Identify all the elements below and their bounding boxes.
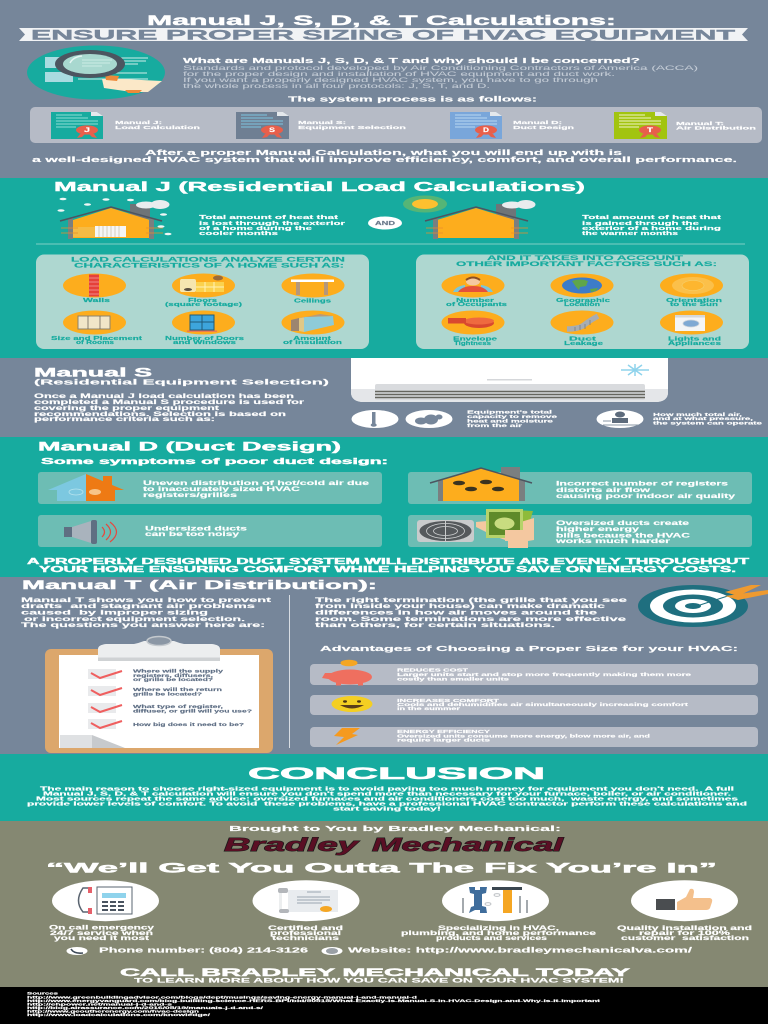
text block: total capacity: from the air [467,423,522,429]
icon: lightning bolt [334,728,360,745]
check items [88,669,122,729]
label: envelope tightness: Tightness [454,341,491,347]
text: uneven distribution: Uneven distribution of hot/cold air due [143,481,370,487]
text block: heat lost: Total amount of heat that [199,215,338,221]
icon: tools [442,880,549,921]
ribbon subtitle: ENSURE PROPER SIZING OF HVAC EQUIPMENT [31,26,736,42]
text block: conclusion [27,786,747,812]
text block: right termination: differences in how air moves around the [315,610,598,616]
heading: conclusion: CONCLUSION [248,765,545,783]
heading: Manual J: Manual J (Residential Load Calculations) [54,179,585,194]
label: floors: (square footage) [165,302,243,308]
label: specializing: plumbing, and home performance [401,931,597,937]
label: size and placement: Size and Placement [51,336,143,342]
text: phone number: Phone number: (804) 214-3126 [99,946,308,955]
text block: Manual S: completed a Manual S procedure is used for [34,400,305,406]
icon: globe [550,274,614,298]
text: brought to you by: Brought to You by Bradley Mechanical: [229,826,561,833]
checklist questions: diffuser, or grill will you use? [133,708,252,714]
label: certified: professional [270,931,342,937]
text block: conclusion: start saving today! [333,806,442,812]
panel: sources [0,987,768,1024]
panel: Manual T [0,577,768,754]
text: uneven distribution: to inaccurately sized HVAC [143,487,301,493]
logo: Bradley Mechanical: Mechanical [372,835,565,855]
label: on call: you need it most [54,936,149,942]
panel: process steps [30,107,762,143]
subheading: equipment selection: (Residential Equipment Selection) [34,378,330,387]
label: walls: Walls [83,298,110,304]
panel: load calculation characteristics [36,254,369,349]
logo: Bradley Mechanical: Bradley [224,835,360,855]
icon: thumbs up [631,880,738,921]
text block: heat gained: Total amount of heat that [582,215,721,221]
label: doors and windows: Number of Doors [165,336,244,342]
icon: grille and money [417,509,534,548]
label: geographic location: Location [564,302,600,308]
icon: document T: T [647,128,654,134]
icon: thermometer [352,410,398,428]
text block: after calculation: a well-designed HVAC system that will improve efficiency, comfort, and overall performance. [32,157,737,164]
label: Manual S [298,120,406,131]
text: energy efficiency: Oversized units consume more energy, blow more air, and [397,734,650,738]
icon: occupants [442,274,504,298]
card: reduces cost [310,660,758,686]
text: oversized ducts: bills because the HVAC [556,534,691,540]
card: incorrect registers [408,467,752,504]
panel: sources: Sources [27,992,58,996]
icon: window [172,310,235,334]
icon: 24h phone [52,880,159,921]
text block: conclusion: Most sources repeat the same advice: oversized furnaces and air conditioners cost too much, waste energy, and sometimes [36,796,738,802]
label: Manual T: Air Distribution [676,126,756,132]
heading: advantages: Advantages of Choosing a Proper Size for your HVAC: [320,646,738,653]
text block: Manual T intro: The questions you answer here are: [21,622,265,629]
label: orientation [666,298,722,308]
text block: total air: How much total air, [653,412,743,418]
text block: intro: What are Manuals J, S, D, & T and why should I be concerned? [183,58,640,65]
text block: intro [183,58,698,90]
icon: document D [450,112,502,139]
callout: properly designed duct system: A PROPERLY DESIGNED DUCT SYSTEM WILL DISTRIBUTE AIR EVENLY THROUGHOUT [27,557,749,566]
icon: floor plan [63,310,126,334]
text block: conclusion: provide lower levels of comfort. To avoid these problems, have a professional HVAC contractor perform these calculations and [27,802,747,808]
text block: heat gained: exterior of a home during [582,226,721,232]
card: undersized ducts [38,515,382,547]
checklist questions: Where will the return [133,687,222,693]
text: incorrect registers: distorts air flow [556,488,651,494]
panel: conclusion [0,754,768,821]
heading: system process: The system process is as follows: [288,96,537,104]
label: quality [617,926,753,942]
heading: other factors: OTHER IMPORTANT FACTORS SUCH AS: [456,262,717,268]
text: uneven distribution [143,481,370,499]
text: increases comfort: in the summer [397,706,460,711]
text block: heat lost [199,215,347,237]
text block: Manual S: recommendations. Selection is based on [34,412,287,418]
text: energy efficiency [397,729,650,742]
icon: document T [614,112,667,139]
label: Manual S: Equipment Selection [298,125,406,131]
text: reduces cost [397,668,692,682]
icon: walls [63,274,126,298]
label: on call: On call emergency [49,926,155,932]
panel: sources: http://www.loadcalculations.com/knowledge/ [27,1013,210,1017]
text block: Manual T intro: drafts and stagnant air problems [21,603,256,610]
heading: Manual S: Manual S [34,368,153,380]
text: increases comfort [397,698,689,711]
label: duct leakage: Duct [569,336,597,342]
text block: Manual S: Once a Manual J load calculation has been [34,394,295,400]
label: on call [49,926,155,942]
label: doors and windows [165,336,244,346]
label: insulation: Amount [293,336,332,342]
call to action: TO LEARN MORE ABOUT HOW YOU CAN SAVE ON YOUR HVAC SYSTEM! [134,979,624,985]
label: ceilings: Ceilings [294,298,331,304]
panel: Manual J [0,178,768,358]
text block: Manual T intro: caused by improper sizing [21,610,208,616]
label: certified: technicians [272,936,340,942]
icon: insulation [282,310,344,334]
panel: other factors [416,254,749,349]
text block: after calculation [32,150,737,164]
icon: phone [66,947,88,955]
icon: document D: D [483,128,490,134]
icon: magnifying glass over document [27,46,165,100]
icon: piggy bank [322,660,372,686]
label: doors and windows: and Windows [173,340,236,346]
callout: properly designed duct system: YOUR HOME ENSURING COMFORT WHILE HELPING YOU SAVE ON ENERGY COSTS. [39,565,736,574]
callout: properly designed duct system [27,557,749,574]
text block: right termination: The right termination (the grille that you see [315,597,628,604]
heading: other factors: AND IT TAKES INTO ACCOUNT [487,256,684,262]
checklist questions: or grills be located? [133,677,213,683]
label: quality: customer satisfaction [621,936,750,942]
heading: other factors [456,256,717,268]
text block: right termination: than others, for certain situations. [315,622,556,629]
panel: header [0,0,768,178]
text: oversized ducts: higher energy [556,527,640,533]
icon: washing machine [660,310,723,334]
label: duct leakage: Leakage [564,341,603,347]
label: orientation: Orientation [666,298,722,304]
label: floors: Floors [188,298,217,304]
text block: right termination: room. Some terminations are more effective [315,616,627,623]
heading: Manual T: Manual T (Air Distribution): [22,580,377,592]
icon: certificate [252,880,360,921]
icon: document S: S [269,128,275,134]
badge: AND: AND [375,221,396,227]
text: energy efficiency: ENERGY EFFICIENCY [397,729,490,734]
icon: ceilings [282,274,344,298]
call to action [120,967,632,985]
label: Manual T: Manual T: [676,121,725,127]
card: oversized ducts [408,509,752,548]
heading: Manual D: Manual D (Duct Design) [38,442,341,454]
label: Manual J: Manual J: [115,120,163,126]
text block: total capacity: capacity to remove [467,414,558,420]
clipboard checklist [45,636,273,753]
label: size and placement [51,336,143,346]
icon: smiley [332,696,372,712]
label: lights and appliances [668,336,721,347]
label: lights and appliances: Lights and [668,336,721,342]
label: Manual S: Manual S: [298,120,347,126]
text block: Manual T intro [21,597,273,629]
text block: total capacity [467,410,558,429]
text: oversized ducts: Oversized ducts create [556,521,690,527]
text: oversized ducts [554,521,691,545]
label: Manual T [676,121,756,132]
icon: sun orientation [660,274,723,298]
ribbon subtitle [19,26,748,42]
checklist questions: registers, diffusers, [133,673,214,679]
text block: total air: and at what pressure, [653,416,754,422]
call to action: CALL BRADLEY MECHANICAL TODAY [120,967,632,979]
label: insulation [283,336,342,346]
label: occupants: of Occupants [446,302,507,308]
subheading: symptoms: Some symptoms of poor duct design: [41,457,388,466]
text block: intro: the whole process in all four protocols: J, S, T, and D. [183,84,491,90]
panel: sources: http://ehpower.net/manual-j-d-and-s [27,1002,172,1006]
label: quality: repair for 100% [639,931,731,937]
label: geographic location: Geographic [556,298,610,304]
panel: sources: http://blog.airassurance.com/2016/05/19/manuals-j-d-and-s/ [27,1006,263,1010]
icon: pressure gauge [596,410,644,428]
label: Manual D: Manual D: [513,120,563,126]
text block: Manual S: performance criteria such as: [34,417,215,423]
label: specializing: Specializing in HVAC, [438,926,560,932]
text: website: Website: http://www.bradleymechanicalva.com/ [348,946,694,955]
text: undersized ducts: Undersized ducts [145,526,248,532]
label: quality: Quality installation and [617,926,753,932]
text block: Manual S [34,394,305,423]
text: incorrect registers: causing poor indoor air quality [556,494,736,500]
label: certified [268,926,344,942]
label: envelope tightness: Envelope [453,336,497,342]
label: floors [165,298,243,308]
checklist questions: Where will the supply [133,669,224,675]
label: duct leakage [564,336,603,347]
icon: sun [403,196,447,212]
icon: target with arrow [638,585,768,627]
text block: heat gained [582,215,721,237]
text: uneven distribution: registers/grilles [143,493,238,499]
checklist questions: What type of register, [133,704,224,710]
text block: intro: for the proper design and installation of HVAC equipment and duct work. [183,72,616,78]
label: Manual D [513,120,574,131]
label: envelope tightness [453,336,497,347]
text: reduces cost: Larger units start and stop more frequently making them more [397,672,692,677]
text block: heat lost: is lost through the exterior [199,221,347,227]
text block: heat lost: cooler months [199,231,278,237]
card: increases comfort [310,695,758,715]
text block: conclusion: Manual J, S, D, & T calculation will ensure you don't spend more than necessary for your furnace, boiler, or air conditioner. [43,792,732,798]
panel: Manual S [0,358,768,437]
badge: AND [368,216,402,230]
card: uneven distribution [38,472,382,504]
text: incorrect registers [556,482,736,500]
text: oversized ducts: works much harder [554,539,671,545]
text block: after calculation: After a proper Manual Calculation, what you will end up with is [145,150,622,157]
text: undersized ducts [145,526,248,538]
text block: intro: Standards and protocol developed by Air Conditioning Contractors of America (ACCA) [183,66,698,72]
text block: Manual S: covering the proper equipment [34,406,219,412]
text: undersized ducts: can be too noisy [145,532,240,538]
heading: load calculations: LOAD CALCULATIONS ANALYZE CERTAIN [71,258,345,264]
text block: heat lost: of a home during the [199,226,312,232]
text block: heat gained: the warmer months [582,231,678,237]
label: Manual D: Duct Design [513,125,574,131]
icon: house with registers [430,467,532,501]
icon: duct [550,310,614,334]
label: geographic location [556,298,610,308]
icon: document J [51,112,103,139]
icon: hot and cold house [48,474,124,501]
label: lights and appliances: Appliances [668,341,721,347]
panel: sources: http://www.energyvanguard.com/blog-building-science-HERS-BPI/bid/50515/What-Exactly-Is-Manual-S-in-HVAC-Design-and-Why-Is-It-Important [27,999,602,1003]
text block: total air: the system can operate [653,420,763,426]
text: increases comfort: Cools and dehumidifies air simultaneously increasing comfort [397,702,689,707]
label: insulation: of insulation [283,340,342,346]
label: specializing [401,926,597,942]
text: reduces cost: costly than smaller units [397,676,510,682]
text block: right termination [315,597,628,629]
checklist questions: How big does it need to be? [133,722,244,728]
text block: conclusion: The main reason to choose right-sized equipment is to avoid paying too much money for equipment you don't need. A full [40,786,735,792]
icon: speaker [64,520,116,544]
text block: Manual T intro: or incorrect equipment selection. [24,616,246,623]
icon: document J: J [84,128,90,134]
card: energy efficiency [310,727,758,747]
heading: load calculations: CHARACTERISTICS OF A HOME SUCH AS: [74,264,344,270]
icon: measuring tape [442,310,504,334]
checklist questions [133,669,252,728]
icon: moisture drops [406,410,452,428]
text: reduces cost: REDUCES COST [397,668,468,673]
label: size and placement: of Rooms [76,340,114,346]
label: occupants: Number [456,298,494,304]
logo: Bradley Mechanical [224,835,565,855]
checklist questions: grills be located? [133,692,202,698]
label: orientation: to the Sun [670,302,718,308]
text block: right termination: from inside your house) can make dramatic [315,603,606,610]
text block: intro: If you want a properly designed HVAC system, you have to go through [183,78,598,84]
label: Manual J: Load Calculation [115,125,200,131]
panel: sources: http://www.geoutherenergy.com/hvac-design [27,1010,199,1014]
icon: house in winter [58,198,172,239]
text block: total capacity: heat and moisture [467,418,554,424]
title: Manual J, S, D, & T Calculations: [147,12,616,28]
slogan: “We’ll Get You Outta The Fix You’re In” [46,861,717,876]
label: occupants [446,298,507,308]
icon: floors [172,274,235,298]
text: incorrect registers: Incorrect number of registers [556,482,729,488]
icon: document S [236,112,289,139]
text block: total capacity: Equipment's total [467,410,552,416]
heading: load calculations [71,258,345,270]
label: Manual J [115,120,200,131]
panel: Manual D [0,437,768,577]
panel: Bradley Mechanical [0,821,768,987]
icon: house in summer [425,200,536,239]
text block: total air [653,412,763,426]
text block: Manual T intro: Manual T shows you how to prevent [21,597,273,604]
icon: globe [322,947,342,955]
text: energy efficiency: require larger ducts [397,738,491,742]
text block: heat gained: is gained through the [582,221,699,227]
text: increases comfort: INCREASES COMFORT [397,698,499,703]
label: on call: 24/7 service when [50,931,154,937]
label: specializing: products and services [436,936,548,942]
panel: sources: http://www.greenbuildingadvisor.com/blogs/dept/musings/saving-energy-manual-j-and-manual-d [27,996,417,1000]
icon: air conditioner [351,358,668,402]
label: certified: Certified and [268,926,344,932]
